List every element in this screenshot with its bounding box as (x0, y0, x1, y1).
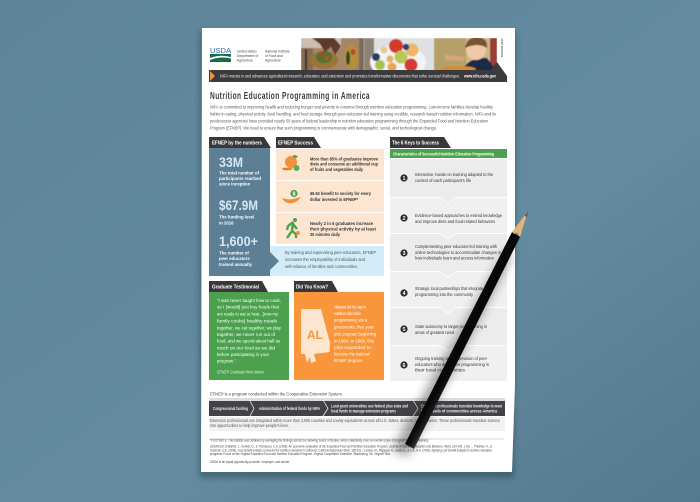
success row: physical activity: their physical activity by at least (310, 226, 377, 232)
key 5: areas of greatest need (415, 330, 454, 335)
subheading bar: Characteristics of Successful Nutrition Education Programming (393, 152, 494, 156)
quote attribution: EFNEP Graduate from Maine (217, 370, 265, 374)
stat: 33M: participants reached (219, 176, 261, 181)
stat: $67.9M (219, 197, 258, 226)
text: mission: NIFA invests in and advances agricultural research, education, and extension and promotes transformative discoveries that solve societal challenges. (220, 74, 460, 78)
text: department name: Department of (237, 54, 258, 58)
text: cooperative extension statement: EFNEP is a program conducted within the Cooperative Extension System. (210, 392, 343, 396)
pencil body (405, 232, 520, 449)
fact text: become the national (334, 352, 370, 356)
mission banner (209, 62, 507, 82)
pencil lead (524, 211, 528, 217)
intro text: NIFA is committed to improving health and reducing hunger and poverty in America through nutrition education programming. Low-income families develop healthy (210, 104, 494, 110)
step: land-grant universities: Land-grant universities use federal plus state and (331, 404, 408, 408)
callout: employability: self-reliance of families and communities. (285, 264, 358, 269)
heading (390, 137, 451, 148)
fact text: grassroots, five year (334, 324, 375, 330)
step: land-grant universities: local funds to manage extension programs (331, 408, 397, 414)
panel: 6 keys to success (390, 137, 507, 381)
quote: together, we never run out of (217, 332, 276, 337)
photo: cooking (301, 38, 364, 71)
text: vertical fact sheet date: MARCH 2017 (500, 38, 504, 57)
quote: family cooks] healthy meals (217, 318, 277, 324)
fact text: programming via a (334, 318, 368, 322)
title: Nutrition Education Programming in America (210, 91, 370, 102)
heading: EFNEP Success (278, 140, 313, 146)
key 5: State autonomy to target programming in (415, 324, 487, 329)
text: website: www.nifa.usda.gov (463, 74, 496, 78)
text: institute name: Agriculture (265, 58, 281, 62)
text: institute name: National Institute (265, 50, 290, 54)
icon: fruit and vegetables (282, 155, 300, 171)
key 3: online technologies to accommodate changes in (415, 250, 502, 255)
callout: employability: By training and supervising peer educators, EFNEP (285, 250, 376, 255)
footnotes and sources (210, 438, 493, 464)
key 2: and improve diets and food-related behaviors (415, 219, 496, 224)
fact text: in 1964. In 1969, this (334, 338, 374, 344)
key 2: Evidence-based approaches to extend knowledge (415, 213, 502, 218)
key 5 (390, 308, 507, 351)
intro text: habits in eating, physical activity, food handling, and food storage through peer-educator-led training using credible, research-based nutrition information. NIFA and its (210, 112, 496, 116)
text: extension professionals note: into opportunities to help improve people's lives. (210, 423, 289, 428)
key 6 (390, 346, 507, 381)
stat: $67.9M: The funding level (219, 214, 254, 220)
key 2: 2 (402, 216, 406, 222)
fact text: Alabama led the way in (334, 304, 366, 310)
stat: 1,600+: 1,600+ (219, 233, 258, 249)
key 1: context of each participant's life (415, 178, 472, 183)
step: congressional funding: Congressional funding (213, 406, 248, 411)
heading: The 6 Keys to Success (392, 140, 439, 146)
quote: before participating in your (217, 352, 270, 357)
photo: child eating (434, 37, 497, 72)
footnotes and sources: Goldman, G.E. (2006). Cost-benefit analysis conducted for nutrition education in California. California Agriculture 60(4): 185-191. | Lambur, M., Rajgopal, R., Lewis, E., & Cox, R.H. (2003). Applying cost benefit analysis to nutrition education (210, 448, 492, 452)
success row: benefit to society: dollar invested in EFNEP* (310, 197, 358, 202)
icon: orange arrow (210, 71, 215, 81)
step: administration of funds: Administration of federal funds by NIFA (259, 406, 320, 411)
key 5: 5 (402, 327, 406, 333)
key 4: programming into the community (415, 292, 474, 297)
quote: so I [would] just buy foods that (217, 304, 280, 310)
heading: Graduate Testimonial (212, 284, 260, 290)
key 1: Interactive, hands-on learning adapted to the (415, 172, 493, 177)
stat: 33M: since inception (219, 182, 251, 186)
icon: USDA logo: USDA (210, 46, 231, 55)
pencil shadow (392, 250, 512, 456)
heading: Did You Know? (296, 284, 328, 290)
pencil wood tip (512, 211, 528, 237)
header: USDA logo and agency names (210, 46, 290, 62)
stat: 1,600+: The number of (219, 250, 249, 256)
success row: benefit to society (276, 181, 384, 212)
quote: are ready to eat or heat...[now my (217, 312, 279, 316)
step: extension professionals: local needs of communities across America (421, 408, 498, 414)
key 4 (390, 272, 507, 313)
heading: EFNEP by the numbers (212, 140, 262, 146)
success row: fruits and vegetables: More than 85% of graduates improve (310, 156, 378, 162)
intro text: predecessor agencies have provided nearly 50 years of federal leadership in nutrition education programming through the Expanded Food and Nutrition Education (210, 118, 489, 124)
footnotes and sources: programs: Focus on the Virginia Expanded Food and Nutrition Education Program. Virginia Cooperative Extension, Blacksburg, VA. Virginia Tech. (210, 452, 391, 456)
stat: 1,600+ (219, 233, 258, 267)
success row: fruits and vegetables (276, 149, 384, 180)
key 2 (390, 198, 507, 239)
header photo strip (301, 38, 497, 70)
stat: 33M: 33M (219, 154, 243, 170)
quote: program.” (217, 358, 237, 364)
text: extension professionals note (209, 417, 505, 431)
footnotes and sources: SOURCES: Dollahite, J., Kenkel, D., & Thompson, C.S. (2008). An economic evaluation of the Expanded Food and Nutrition Education Program. Journal of Nutrition Education and Behavior, 40(3), 134-143. | Joy, ... Pradhan, V., & (210, 444, 493, 448)
key 6: educators who deliver the programming in (415, 362, 489, 367)
icon: dollar in hand: $ (293, 192, 296, 198)
fact text: nutrition education (334, 311, 361, 316)
map: Alabama: AL (307, 328, 323, 342)
success row: benefit to society: $9.62 benefit to society for every (310, 191, 371, 196)
panel: EFNEP success (270, 137, 384, 276)
key 1: 1 (402, 176, 406, 182)
stat: 1,600+: peer educators (219, 256, 250, 261)
fact text: pilot program beginning (334, 332, 377, 336)
panel: did you know (294, 281, 384, 380)
process chevrons (209, 398, 505, 416)
key 1 (390, 159, 507, 203)
key 4: 4 (402, 291, 406, 297)
footnotes and sources: *FOOTNOTE: This statistic was obtained by averaging the findings across the following series of studies, which collectively cover an overall scope of programming effectiveness. (210, 438, 429, 442)
key 6: Ongoing training and supervision of peer (415, 356, 487, 361)
text: department name: Agriculture (237, 58, 253, 62)
callout: employability: increases the employability of individuals and (285, 257, 366, 262)
stat: 33M: The total number of (219, 170, 260, 176)
fact text: pilot expanded to (334, 345, 372, 350)
intro text: Program (EFNEP). We need to ensure that such programming is commensurate with demographic, social, and technological change. (210, 126, 437, 130)
success row: physical activity: Nearly 2 in 5 graduates increase (310, 221, 374, 226)
success row: physical activity: 30 minutes daily (310, 232, 340, 237)
step: extension professionals: Extension professionals translate knowledge to meet (421, 404, 502, 408)
footnotes and sources: USDA is an equal opportunity provider, employer, and lender. (210, 460, 290, 464)
key 3: Complementing peer educator-led training with (415, 244, 497, 249)
key 6: their local communities (415, 368, 466, 372)
quote: together, we eat together, we play (217, 326, 282, 330)
paper sheet (201, 28, 515, 472)
stat: $67.9M: $67.9M (219, 197, 258, 213)
text: extension professionals note: Extension professionals are integrated within more than 3,000 counties and county equivalents across all U.S. states, districts, and territories. These professionals translate science (210, 418, 501, 423)
key 3: how individuals learn and access information (415, 256, 494, 260)
key 3 (390, 234, 507, 277)
success row: physical activity (276, 213, 384, 244)
pencil (405, 211, 528, 449)
text: institute name: of Food and (265, 54, 283, 58)
paper shadow (199, 32, 516, 478)
quote: “I was never taught how to cook, (217, 298, 281, 303)
stat: 1,600+: trained annually (219, 262, 253, 267)
subheading bar (390, 149, 507, 158)
fact text: EFNEP program. (334, 358, 363, 363)
panel: EFNEP by the numbers (209, 137, 271, 276)
photo: fruit bowl (364, 38, 434, 70)
success row: fruits and vegetables: diets and consume an additional cup (310, 162, 378, 166)
quote: food, and we spend about half as (217, 338, 280, 344)
quote: much on our food as we did (217, 346, 276, 350)
key 3: 3 (402, 251, 406, 257)
panel: graduate testimonial (209, 281, 289, 380)
success row: fruits and vegetables: of fruits and vegetables daily (310, 167, 363, 172)
stat: $67.9M: in 2016 (219, 220, 234, 226)
stat: 33M (219, 154, 261, 186)
key 6: 6 (402, 363, 406, 369)
icon: person dribbling (287, 218, 300, 238)
key 4: Strategic local partnerships that integrate (415, 286, 483, 291)
callout: employability (270, 246, 384, 276)
text: department name: United States (237, 50, 257, 54)
